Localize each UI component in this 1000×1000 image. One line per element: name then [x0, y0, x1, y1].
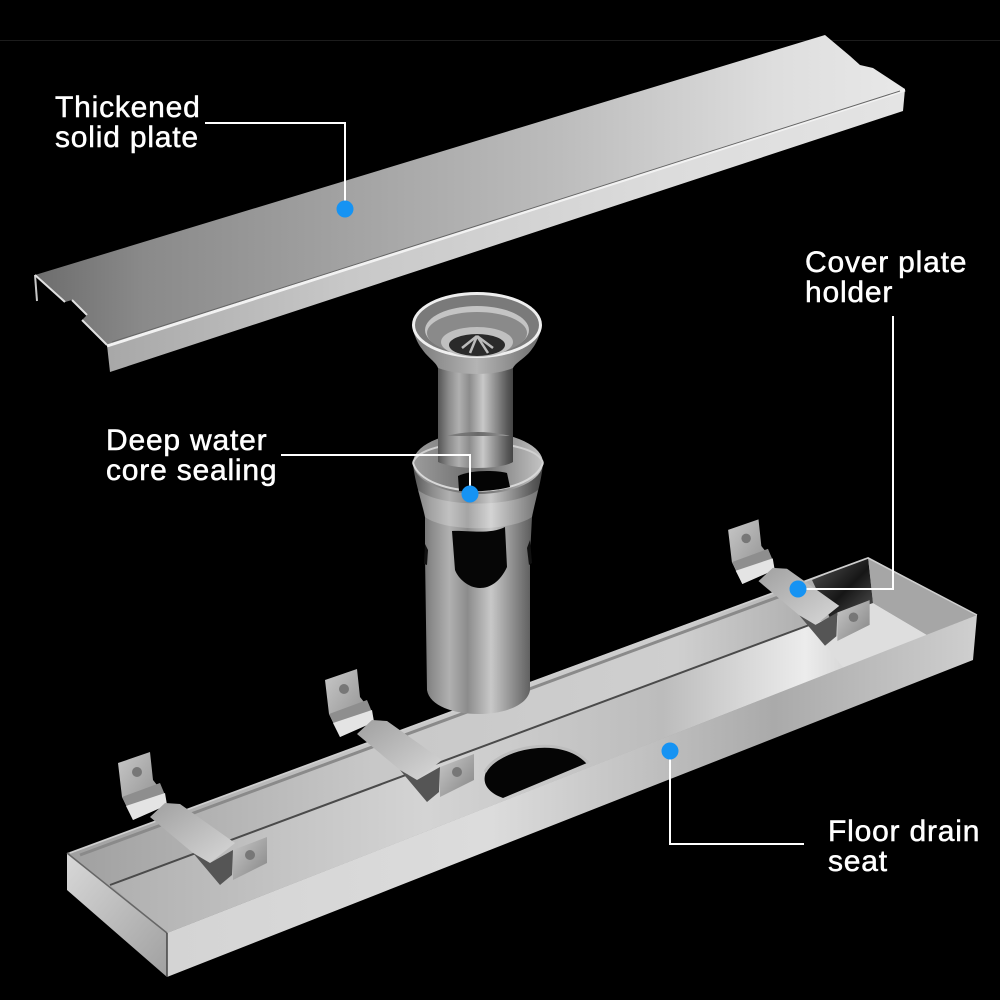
callout: cover plate holder: Cover plate	[805, 246, 967, 279]
callout: thickened solid plate: solid plate	[55, 121, 199, 154]
callout: deep water core sealing: core sealing	[106, 454, 277, 487]
callout: thickened solid plate: Thickened	[55, 91, 201, 124]
clip middle	[325, 669, 474, 802]
callout: deep water core sealing	[106, 424, 478, 502]
water seal core upper tube	[412, 292, 542, 468]
clip right	[728, 519, 870, 646]
floor drain seat	[67, 557, 977, 977]
callout: floor drain seat: seat	[828, 845, 888, 878]
callout: deep water core sealing: Deep water	[106, 424, 267, 457]
callout: floor drain seat	[662, 742, 980, 878]
callout: thickened solid plate	[55, 91, 354, 218]
clip left	[118, 752, 267, 885]
water seal core lower cup	[413, 432, 543, 714]
callout: cover plate holder: holder	[805, 276, 893, 309]
callout: floor drain seat: Floor drain	[828, 815, 980, 848]
cover plate	[35, 35, 905, 372]
callout: cover plate holder	[790, 246, 967, 598]
